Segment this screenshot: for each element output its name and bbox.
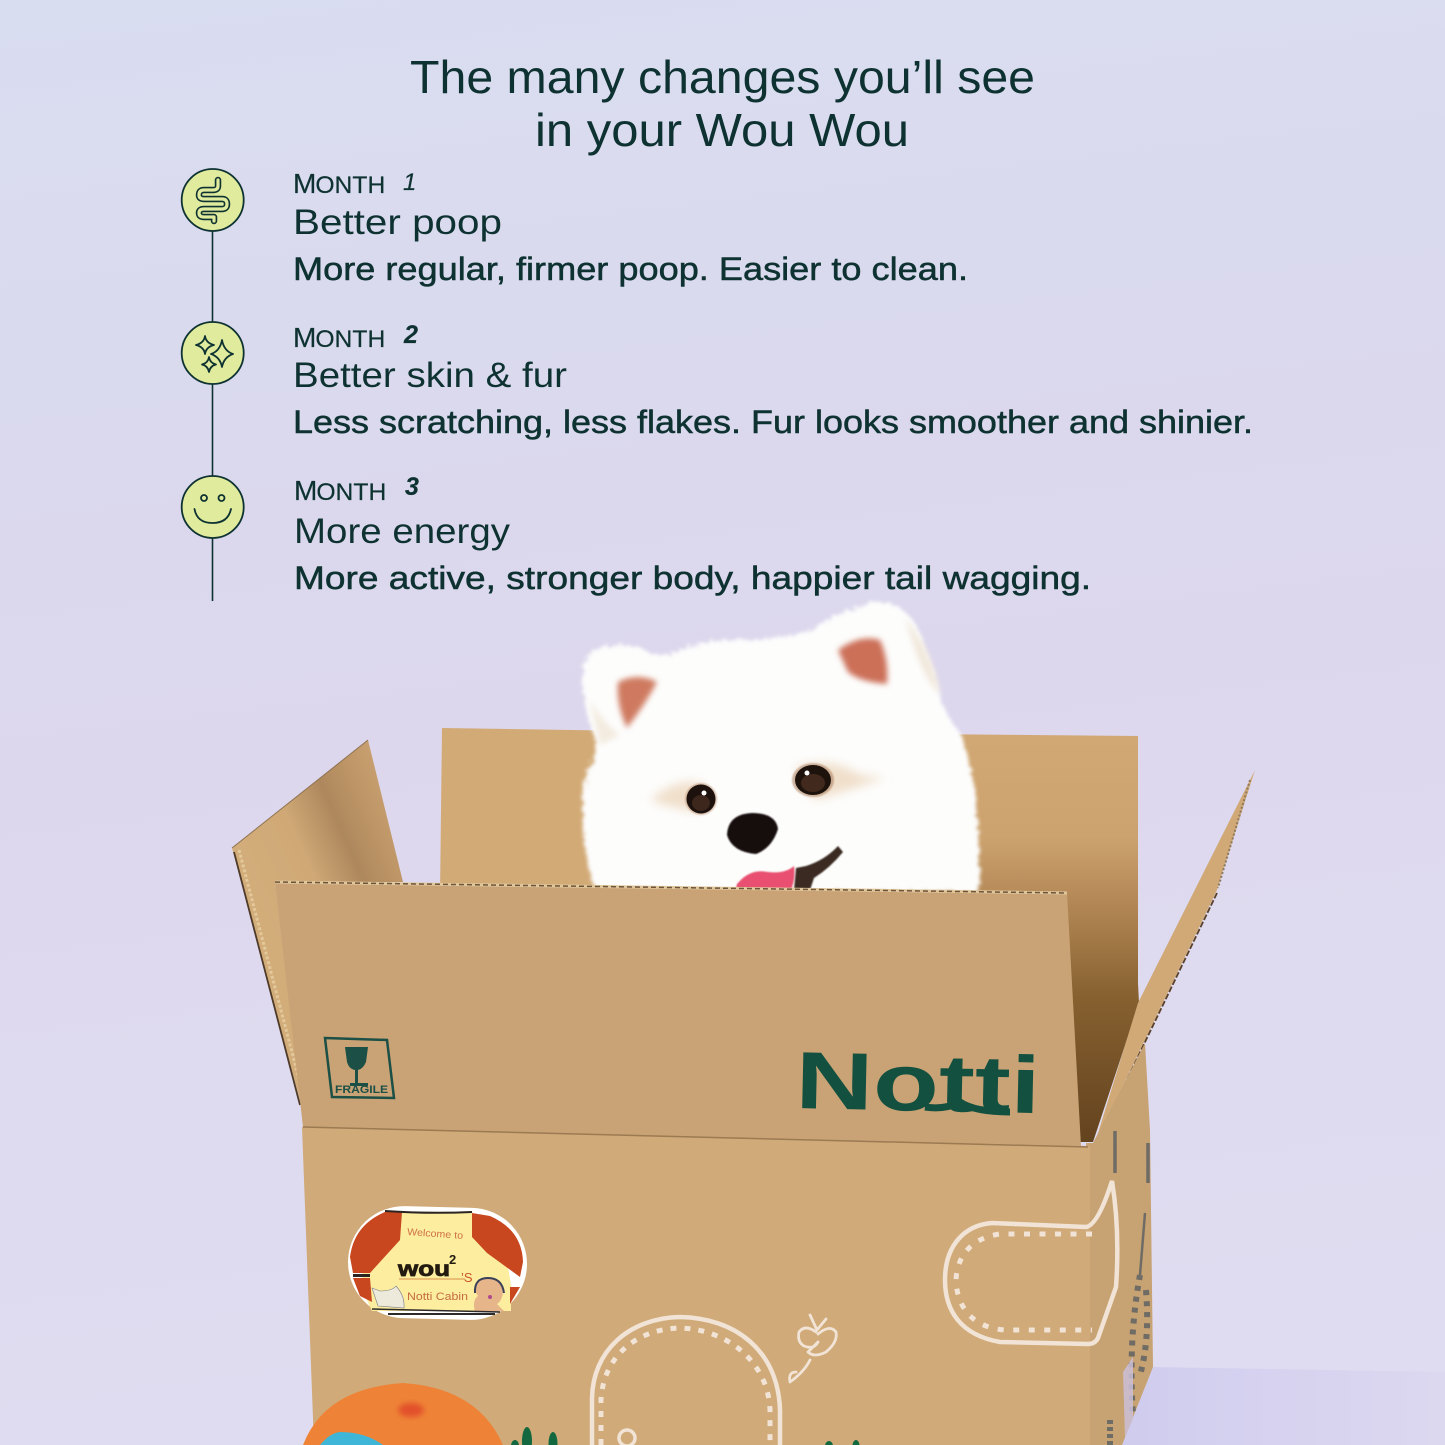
flap bottom fold <box>303 1127 1088 1147</box>
logo ligature <box>925 1102 1010 1112</box>
orange stem <box>398 1403 424 1417</box>
left ear inner <box>618 677 657 728</box>
heading: Better skin & fur <box>293 356 567 395</box>
month label 2: MONTH <box>293 322 383 353</box>
month label 3: MONTH <box>294 475 384 506</box>
nose <box>727 813 778 854</box>
sticker <box>347 1205 528 1321</box>
right flap corrugated edge <box>1098 893 1217 1140</box>
right ear inner <box>838 638 887 684</box>
right eye <box>792 763 834 797</box>
left flap corrugated edge <box>234 852 300 1105</box>
back panel right <box>700 732 1139 1142</box>
face shading <box>650 763 885 812</box>
title: The many changes you’ll see <box>410 51 1035 103</box>
heading: Better poop <box>293 203 502 242</box>
dog <box>582 602 980 892</box>
heading: More energy <box>294 512 511 551</box>
printed illustration: arch <box>592 1317 780 1445</box>
step: month 2 <box>182 321 1253 440</box>
right side panel <box>1086 1043 1153 1445</box>
sticker: ’S <box>461 1270 473 1285</box>
icon: intestine <box>182 169 244 231</box>
side sticker <box>1123 1357 1133 1437</box>
character <box>474 1278 504 1312</box>
description: More regular, firmer poop. Easier to clean. <box>293 251 968 287</box>
title: in your Wou Wou <box>535 104 909 156</box>
icon: fragile <box>325 1038 394 1098</box>
right flap <box>1095 770 1255 1143</box>
sticker: Notti Cabin <box>407 1291 468 1303</box>
sticker: Welcome to <box>407 1227 464 1242</box>
step: month 1 <box>182 168 968 287</box>
sticker: wou <box>397 1258 450 1281</box>
cat <box>372 1286 404 1308</box>
flap top corrugation <box>275 882 1067 893</box>
description: Less scratching, less flakes. Fur looks smoother and shinier. <box>293 404 1253 440</box>
ear shade left <box>590 700 620 745</box>
mouth <box>794 846 843 890</box>
sticker stage <box>360 1212 511 1311</box>
lower front panel <box>302 1127 1090 1445</box>
grass <box>511 1427 860 1445</box>
title <box>410 51 1035 156</box>
left eye <box>685 783 717 815</box>
blue stripe <box>320 1432 383 1445</box>
month label 1: MONTH <box>293 168 383 199</box>
icon: smiley <box>182 476 244 538</box>
month label 3: 3 <box>405 473 419 501</box>
cardboard box: front <box>275 882 1153 1445</box>
logo: Notti: Notti <box>795 1036 1041 1131</box>
front flap <box>275 882 1081 1146</box>
timeline line <box>212 230 214 601</box>
orange body <box>303 1383 503 1445</box>
flap top edge <box>275 882 1067 893</box>
sticker: 2 <box>449 1252 456 1267</box>
step: month 3 <box>182 473 1091 596</box>
orange toy <box>303 1383 503 1445</box>
side print marks <box>1110 1131 1148 1445</box>
left flap <box>232 740 403 1108</box>
description: More active, stronger body, happier tail wagging. <box>294 560 1091 596</box>
floor shadow <box>1110 1367 1445 1445</box>
ear shade right <box>905 618 940 695</box>
month label 1: 1 <box>403 169 416 196</box>
tongue <box>735 866 794 892</box>
icon: fragile: FRAGILE <box>335 1084 388 1096</box>
printed illustration: stadium tag <box>945 1181 1117 1344</box>
month label 2: 2 <box>403 321 418 349</box>
printed illustration: butterfly <box>790 1315 836 1382</box>
cardboard box: back and flaps <box>232 728 1255 1143</box>
icon: sparkles <box>182 322 244 384</box>
dog fur <box>582 602 980 892</box>
back panel left <box>440 728 700 895</box>
curtains <box>350 1212 402 1273</box>
